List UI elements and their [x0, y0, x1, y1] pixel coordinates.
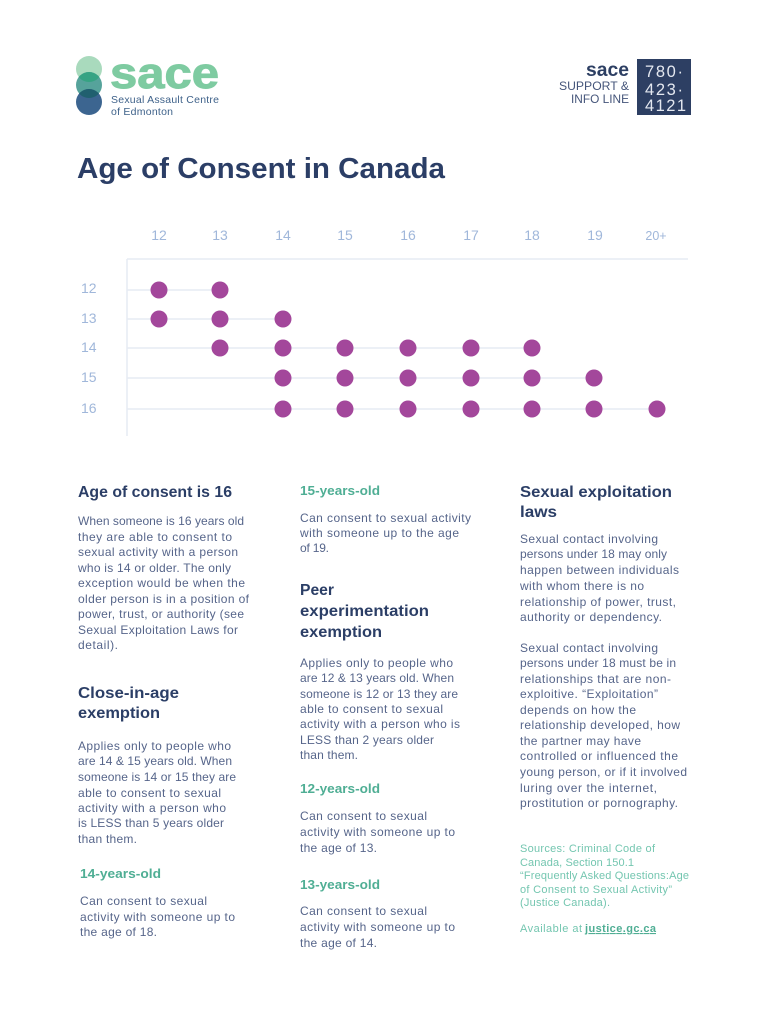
left axis: person ages: 16: [81, 400, 97, 416]
top axis: partner ages: 16: [400, 227, 416, 243]
panel: sexual exploitation laws: persons under 18 must be in: [520, 656, 676, 670]
left axis: person ages: 14: [81, 339, 97, 355]
panel: sexual exploitation laws: exploitive. “Exploitation”: [520, 687, 658, 701]
top axis: partner ages: [151, 227, 667, 243]
panel: peer experimentation exemption: Peer: [300, 582, 334, 599]
panel: age of consent is 16: power, trust, or authority (see: [78, 607, 244, 621]
panel: close-in-age exemption: exemption: [78, 705, 160, 722]
panel: peer experimentation exemption: able to consent to sexual: [300, 702, 443, 716]
panel: age of consent is 16: Age of consent is 16: [78, 484, 232, 501]
top axis: partner ages: 20+: [645, 229, 667, 243]
panel: peer experimentation exemption: someone is 12 or 13 they are: [300, 687, 458, 701]
panel: close-in-age exemption: someone is 14 or 15 they are: [78, 770, 236, 784]
panel: sexual exploitation laws: persons under 18 may only: [520, 547, 667, 561]
panel: close-in-age exemption: Applies only to people who: [78, 739, 231, 753]
panel: age of consent is 16: When someone is 16 years old: [78, 514, 244, 528]
panel: 12-years-old: the age of 13.: [300, 841, 377, 855]
sources: of Consent to Sexual Activity”: [520, 884, 672, 896]
panel: close-in-age exemption: than them.: [78, 832, 137, 846]
title: Age of Consent in Canada: [77, 153, 446, 185]
panel: peer experimentation exemption: Applies only to people who: [300, 656, 453, 670]
sources: Available at: [520, 923, 582, 935]
panel: sexual exploitation laws: Sexual contact involving: [520, 532, 658, 546]
sources: Canada, Section 150.1: [520, 857, 634, 869]
top axis: partner ages: 15: [337, 227, 353, 243]
panel: 15-years-old: 15-years-old: [300, 484, 380, 498]
support and info line phone block: 423·: [645, 81, 683, 99]
support and info line phone block: 780·: [645, 63, 683, 81]
logo: SACE: sace: [110, 49, 219, 98]
panel: sexual exploitation laws: happen between individuals: [520, 563, 679, 577]
panel: sexual exploitation laws: relationships that are non-: [520, 672, 671, 686]
top axis: partner ages: 14: [275, 227, 291, 243]
panel: close-in-age exemption: is LESS than 5 years older: [78, 816, 224, 830]
panel: sexual exploitation laws: Sexual contact involving: [520, 641, 658, 655]
dots: [150, 282, 666, 418]
panel: 12-years-old: activity with someone up to: [300, 825, 455, 839]
top axis: partner ages: 19: [587, 227, 603, 243]
panel: 13-years-old: activity with someone up to: [300, 920, 455, 934]
top axis: partner ages: 13: [212, 227, 228, 243]
panel: close-in-age exemption: Close-in-age: [78, 685, 179, 702]
left axis: person ages: 15: [81, 369, 97, 385]
panel: sexual exploitation laws: depends on how the: [520, 703, 636, 717]
panel: sexual exploitation laws: with whom there is no: [519, 579, 644, 593]
panel: sexual exploitation laws: authority or dependency.: [520, 610, 662, 624]
panel: 14-years-old: the age of 18.: [80, 925, 157, 939]
panel: sexual exploitation laws: relationship developed, how: [520, 718, 680, 732]
left axis: person ages: 13: [81, 310, 97, 326]
panel: age of consent is 16: older person is in a position of: [78, 592, 250, 606]
panel: sexual exploitation laws: luring over the internet,: [520, 781, 657, 795]
panel: peer experimentation exemption: [300, 582, 460, 762]
panel: sexual exploitation laws: young person, or if it involved: [520, 765, 687, 779]
panel: peer experimentation exemption: experimentation: [300, 603, 429, 620]
panel: 12-years-old: Can consent to sexual: [300, 809, 427, 823]
panel: 14-years-old: [80, 867, 235, 939]
panel: peer experimentation exemption: LESS than 2 years older: [300, 733, 434, 747]
panel: peer experimentation exemption: than them.: [300, 748, 358, 762]
chart: age of consent dot matrix: [81, 227, 688, 436]
panel: age of consent is 16: detail).: [78, 638, 118, 652]
panel: close-in-age exemption: able to consent to sexual: [78, 786, 221, 800]
panel: age of consent is 16: who is 14 or older. The only: [77, 561, 231, 575]
logo: SACE: of Edmonton: [111, 106, 173, 118]
panel: sexual exploitation laws: laws: [520, 504, 557, 521]
support and info line phone block: SUPPORT &: [559, 79, 629, 93]
panel: sexual exploitation laws: controlled or influenced the: [520, 749, 678, 763]
sources: Sources: Criminal Code of: [520, 843, 656, 855]
panel: peer experimentation exemption: exemption: [300, 624, 382, 641]
panel: 15-years-old: [299, 484, 471, 555]
panel: sexual exploitation laws: [519, 484, 687, 810]
panel: age of consent is 16: Sexual Exploitation Laws for: [78, 623, 238, 637]
panel: age of consent is 16: [77, 484, 250, 652]
panel: close-in-age exemption: activity with a person who: [78, 801, 226, 815]
support and info line phone block: [559, 59, 691, 115]
sources: [520, 843, 689, 935]
sources: (Justice Canada).: [520, 897, 610, 909]
support and info line phone block: sace: [586, 60, 629, 81]
panel: age of consent is 16: they are able to consent to: [78, 530, 232, 544]
panel: sexual exploitation laws: Sexual exploitation: [520, 484, 672, 501]
left axis: person ages: [81, 280, 97, 416]
panel: 15-years-old: with someone up to the age: [299, 526, 459, 540]
panel: 15-years-old: Can consent to sexual activity: [300, 511, 471, 525]
top axis: partner ages: 17: [463, 227, 479, 243]
panel: sexual exploitation laws: prostitution or pornography.: [520, 796, 678, 810]
panel: 12-years-old: [300, 782, 455, 855]
left axis: person ages: 12: [81, 280, 97, 296]
panel: 13-years-old: 13-years-old: [300, 878, 380, 892]
top axis: partner ages: 18: [524, 227, 540, 243]
support and info line phone block: INFO LINE: [571, 92, 629, 106]
panel: 15-years-old: of 19.: [300, 541, 329, 555]
top axis: partner ages: 12: [151, 227, 167, 243]
panel: 13-years-old: [300, 878, 455, 950]
panel: 14-years-old: activity with someone up to: [80, 910, 235, 924]
panel: 13-years-old: Can consent to sexual: [300, 904, 427, 918]
logo: SACE: [76, 56, 218, 115]
panel: close-in-age exemption: are 14 & 15 years old. When: [78, 754, 232, 768]
sources: “Frequently Asked Questions:Age: [520, 870, 689, 882]
panel: 13-years-old: the age of 14.: [300, 936, 377, 950]
panel: peer experimentation exemption: activity with a person who is: [300, 717, 460, 731]
panel: sexual exploitation laws: relationship of power, trust,: [520, 595, 676, 609]
panel: age of consent is 16: sexual activity with a person: [78, 545, 238, 559]
panel: 14-years-old: 14-years-old: [80, 867, 161, 881]
panel: close-in-age exemption: [78, 685, 236, 846]
support and info line phone block: 4121: [645, 97, 686, 115]
panel: 12-years-old: 12-years-old: [300, 782, 380, 796]
panel: 14-years-old: Can consent to sexual: [80, 894, 207, 908]
panel: age of consent is 16: exception would be when the: [78, 576, 245, 590]
sources: justice.gc.ca: [584, 923, 657, 935]
logo: SACE: Sexual Assault Centre: [111, 94, 219, 106]
panel: peer experimentation exemption: are 12 & 13 years old. When: [300, 671, 454, 685]
panel: sexual exploitation laws: the partner may have: [520, 734, 641, 748]
